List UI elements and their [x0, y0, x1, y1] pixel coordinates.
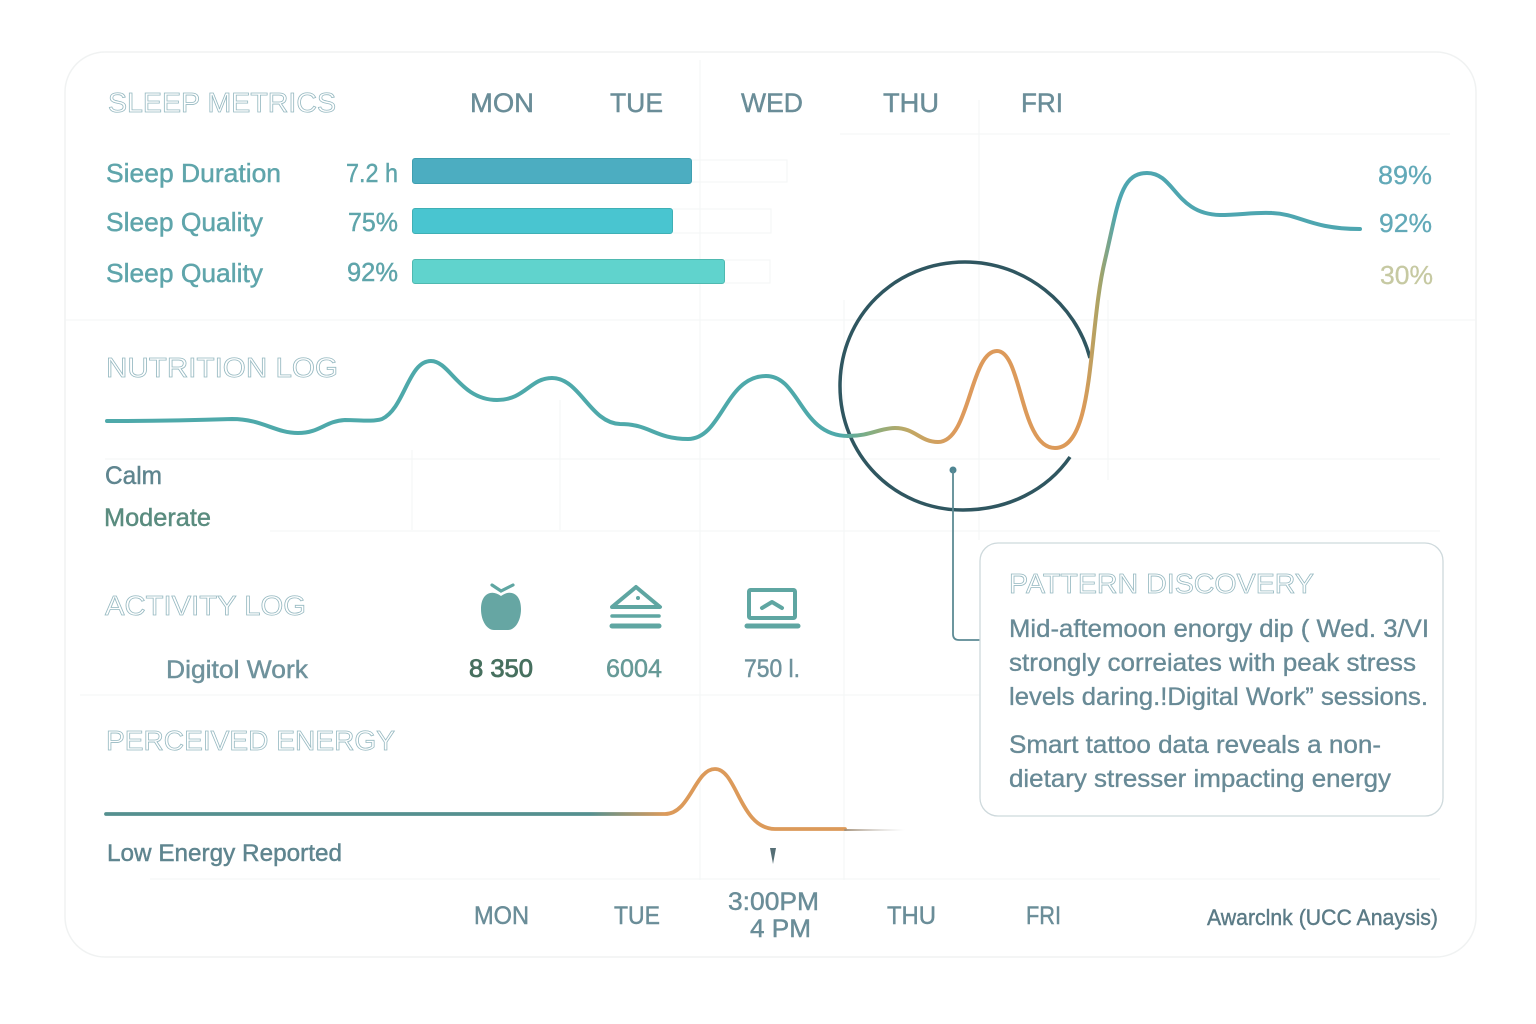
icon: apple [481, 585, 521, 630]
metric: sleep duration: Sieep Duration [106, 158, 281, 188]
top day labels: TUE [610, 88, 663, 118]
metric: sleep quality 75%: 75% [348, 207, 398, 237]
right side percentages: 89% [1378, 160, 1432, 190]
metric: sleep quality 75% [106, 207, 672, 237]
heading: nutrition log: NUTRITION LOG [106, 352, 338, 383]
top day labels: THU [883, 88, 939, 118]
metric: sleep quality 92%: Sleep Quality [106, 258, 263, 288]
bottom day labels: FRI [1026, 902, 1061, 930]
bottom day labels [474, 888, 1061, 943]
stress labels [104, 462, 211, 532]
metric: sleep quality 92% [106, 257, 724, 288]
panel: sleep metric rows [106, 158, 724, 288]
metric: sleep duration [106, 158, 692, 188]
bottom day labels: MON [474, 902, 529, 930]
heading: activity log: ACTIVITY LOG [105, 590, 306, 621]
energy label: Low Energy Reported [107, 840, 342, 867]
callout: pattern discovery [980, 543, 1443, 816]
callout body text: dietary stresser impacting energy [1009, 765, 1392, 793]
callout body text: Smart tattoo data reveals a non- [1009, 731, 1381, 759]
top day labels [470, 88, 1063, 118]
metric: sleep quality 75%: Sleep Quality [106, 207, 263, 237]
activity values: 750 l. [744, 655, 800, 683]
callout body text: Mid-aftemoon enorgy dip ( Wed. 3/VI [1009, 615, 1429, 643]
metric: sleep quality 92%: 92% [347, 257, 398, 287]
marker: 3 PM pointer [770, 848, 776, 864]
line chart: stress curve [107, 173, 1360, 448]
connector from chart to callout [950, 466, 981, 640]
bottom day labels: TUE [614, 902, 660, 930]
activity label: Digitol Work [166, 656, 309, 684]
stress labels: Moderate [104, 504, 211, 532]
bottom day labels: 4 PM [750, 915, 811, 943]
highlight circle [840, 262, 1090, 510]
right side percentages: 30% [1380, 260, 1433, 290]
activity values [469, 655, 800, 683]
callout body text [1009, 615, 1429, 793]
bottom day labels: 3:00PM [728, 888, 819, 916]
top day labels: MON [470, 88, 534, 118]
metric: sleep duration: 7.2 h [346, 158, 398, 188]
callout body text: strongly correiates with peak stress [1009, 649, 1416, 677]
stress labels: Calm [105, 462, 162, 490]
source note: Awarclnk (UCC Anaysis) [1207, 905, 1438, 930]
top day labels: WED [741, 88, 803, 118]
heading: sleep metrics: SLEEP METRICS [108, 87, 336, 118]
right side percentages [1378, 160, 1433, 290]
icon: stacked layers [612, 587, 660, 626]
line chart: perceived energy [106, 769, 905, 830]
icon: laptop [747, 590, 798, 626]
callout heading: PATTERN DISCOVERY [1009, 568, 1314, 599]
bottom day labels: THU [887, 902, 936, 930]
heading: perceived energy: PERCEIVED ENERGY [106, 725, 395, 756]
callout body text: levels daring.!Digital Work” sessions. [1009, 683, 1428, 711]
top day labels: FRI [1021, 88, 1063, 118]
right side percentages: 92% [1379, 208, 1432, 238]
activity values: 8 350 [469, 655, 533, 683]
activity values: 6004 [606, 655, 662, 683]
